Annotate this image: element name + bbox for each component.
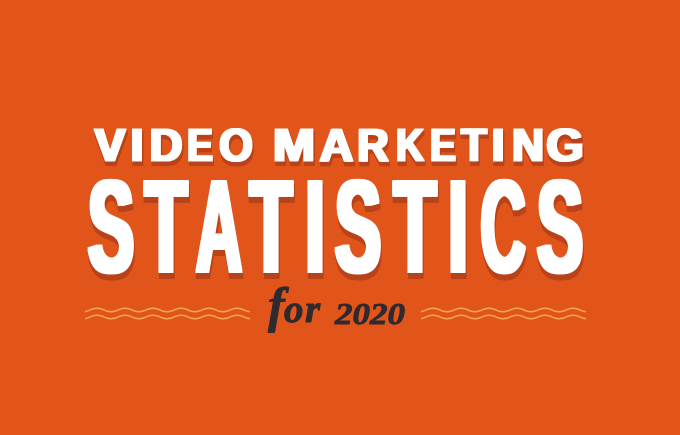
title: STATISTICS: I: [305, 152, 325, 300]
title: VIDEO MARKETING: V: [95, 118, 125, 170]
subtitle: for 2020: 2020: [334, 296, 405, 331]
title: STATISTICS: T: [394, 152, 436, 300]
title: VIDEO MARKETING: A: [320, 118, 353, 170]
subtitle: for 2020: o: [284, 288, 304, 331]
title: STATISTICS: S: [537, 152, 583, 300]
title: VIDEO MARKETING: D: [150, 118, 182, 170]
title: VIDEO MARKETING: T: [461, 118, 486, 170]
wave: right: [412, 308, 594, 319]
title: VIDEO MARKETING: R: [357, 118, 389, 170]
title: STATISTICS: I: [448, 152, 468, 300]
title: STATISTICS: T: [250, 152, 292, 300]
wave: left: [76, 308, 258, 319]
subtitle: for 2020: [268, 277, 405, 333]
title: VIDEO MARKETING: I: [131, 118, 143, 170]
title: STATISTICS: T: [145, 152, 187, 300]
subtitle: for 2020: r: [305, 288, 321, 331]
wavy decorations and subtitle: [85, 286, 586, 333]
title: VIDEO MARKETING: M: [273, 118, 315, 170]
title: VIDEO MARKETING: E: [430, 118, 455, 170]
title: VIDEO MARKETING: G: [546, 118, 584, 170]
title: VIDEO MARKETING: O: [219, 118, 252, 170]
title: STATISTICS: C: [480, 152, 525, 300]
title: STATISTICS: S: [88, 152, 133, 300]
title: VIDEO MARKETING: N: [512, 118, 543, 170]
title: VIDEO MARKETING: K: [396, 118, 423, 170]
title: STATISTICS: S: [335, 152, 380, 300]
title: STATISTICS: A: [196, 152, 241, 300]
subtitle: for 2020: f: [268, 277, 289, 333]
title: VIDEO MARKETING: E: [187, 118, 213, 170]
title: VIDEO MARKETING: I: [492, 118, 504, 170]
